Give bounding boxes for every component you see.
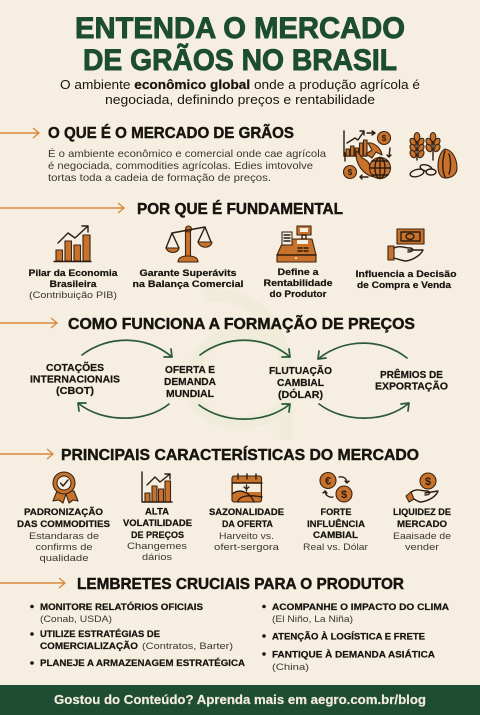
node: prêmios — [375, 368, 448, 392]
subtitle: O ambiente econômico global onde a produção agrícola é — [60, 78, 420, 92]
item: liquidez — [393, 473, 451, 553]
item: influência cambial: Real vs. Dólar — [303, 542, 368, 553]
item: rentabilidade: Define a — [278, 267, 319, 278]
list: right column: ATENÇÃO À LOGÍSTICA E FRETE — [272, 632, 425, 642]
icon: scale — [166, 226, 212, 262]
heading: o que é o mercado de grãos: O QUE É O MERCADO DE GRÃOS — [48, 122, 294, 142]
heading: lembretes cruciais: LEMBRETES CRUCIAIS PARA O PRODUTOR — [77, 576, 404, 593]
node: cotações: (CBOT) — [56, 385, 94, 397]
node: prêmios: PRÊMIOS DE — [380, 368, 443, 381]
item: liquidez: LIQUIDEZ DE — [393, 507, 451, 518]
list: right column: ACOMPANHE O IMPACTO DO CLIMA — [272, 602, 449, 613]
item: liquidez: vender — [405, 542, 439, 553]
node: cotações — [30, 361, 120, 397]
item: pilar da economia: Brasileira — [50, 279, 97, 290]
item: padronização: PADRONIZAÇÃO — [24, 507, 103, 518]
text block: definition: tortas toda a cadeia de formação de preços. — [48, 173, 271, 184]
icon: currency exchange: $ — [341, 489, 347, 501]
heading: como funciona: COMO FUNCIONA A FORMAÇÃO DE PREÇOS — [68, 313, 415, 333]
icon: currency exchange: € — [325, 476, 331, 488]
node: flutuação cambial: (DÓLAR) — [278, 388, 323, 401]
icon: ribbon — [53, 472, 78, 503]
node: oferta e demanda — [164, 364, 216, 400]
icon: harvest calendar — [232, 474, 262, 502]
list: left column: PLANEJE A ARMAZENAGEM ESTRATÉGICA — [40, 658, 245, 669]
list: left column: COMERCIALIZAÇÃO — [40, 641, 138, 652]
item: padronização: DAS COMMODITIES — [17, 519, 110, 530]
icon: bar chart growth — [54, 226, 91, 262]
item: volatilidade — [123, 472, 192, 563]
node: prêmios: EXPORTAÇÃO — [375, 380, 448, 392]
node: cotações: COTAÇÕES — [46, 361, 104, 374]
item: padronização: confirms de — [36, 542, 92, 553]
subtitle: negociada, definindo preços e rentabilidade — [105, 93, 375, 107]
icon: market cycle: $ — [382, 134, 387, 143]
item: padronização: qualidade — [40, 553, 88, 564]
node: flutuação cambial — [269, 364, 332, 401]
list: left column — [30, 601, 245, 669]
item: superávits — [132, 226, 244, 290]
item: influência cambial: FORTE — [320, 507, 352, 518]
title: ENTENDA O MERCADO — [75, 12, 405, 45]
item: sazonalidade: SAZONALIDADE — [209, 507, 284, 518]
item: influência cambial: CAMBIAL — [313, 530, 358, 541]
item: sazonalidade: ofert-sergora — [214, 542, 280, 553]
icon: wheat and seeds — [409, 132, 457, 178]
list: left column: (Contratos, Barter) — [142, 641, 233, 652]
item: rentabilidade: Rentabilidade — [264, 278, 332, 289]
item: pilar da economia: (Contribuição PIB) — [29, 290, 117, 301]
item: sazonalidade: DA OFERTA — [222, 519, 273, 530]
subtitle — [60, 78, 420, 107]
heading: por que é fundamental: POR QUE É FUNDAMENTAL — [137, 199, 343, 218]
item: influência cambial: INFLUÊNCIA — [307, 518, 365, 530]
item: influência cambial — [303, 472, 368, 553]
item: liquidez: Eaaisade de — [393, 531, 451, 542]
item: volatilidade: DE PREÇOS — [131, 530, 184, 541]
arrow: section 5 — [0, 578, 65, 588]
node: cotações: INTERNACIONAIS — [30, 374, 120, 386]
list: left column: UTILIZE ESTRATÉGIAS DE — [40, 629, 160, 640]
item: rentabilidade — [264, 226, 332, 300]
icon: market cycle — [344, 131, 391, 179]
footer — [0, 685, 480, 715]
node: oferta e demanda: OFERTA E — [165, 364, 215, 376]
title: DE GRÃOS NO BRASIL — [83, 43, 397, 77]
footer: Gostou do Conteúdo? Aprenda mais em aegro.com.br/blog — [54, 692, 426, 707]
heading: principais características: PRINCIPAIS CARACTERÍSTICAS DO MERCADO — [61, 445, 419, 464]
arrow: section 3 — [0, 318, 57, 328]
node: oferta e demanda: DEMANDA — [164, 376, 216, 388]
text block: definition: É o ambiente econômico e comercial onde cae agrícola — [48, 147, 326, 160]
item: sazonalidade: Harveito vs. — [219, 531, 274, 542]
item: pilar da economia: Pilar da Economia — [28, 268, 118, 279]
icon: coin in hand: $ — [425, 476, 431, 488]
item: rentabilidade: do Produtor — [270, 289, 327, 300]
list: right column: (China) — [272, 662, 309, 673]
icon: volatility chart — [142, 472, 172, 502]
item: volatilidade: ALTA — [145, 506, 169, 518]
node: oferta e demanda: MUNDIAL — [166, 388, 215, 400]
item: decisão: de Compra e Venda — [357, 280, 452, 291]
title — [75, 12, 405, 77]
list: right column — [262, 602, 449, 673]
item: padronização — [17, 472, 110, 564]
list: left column: MONITORE RELATÓRIOS OFICIAIS — [40, 601, 203, 613]
item: liquidez: MERCADO — [397, 519, 447, 530]
icon: currency exchange — [320, 472, 352, 502]
list: left column: (Conab, USDA) — [40, 614, 112, 625]
item: sazonalidade — [209, 474, 284, 553]
item: volatilidade: VOLATILIDADE — [123, 518, 192, 529]
arrow: section 1 — [0, 128, 39, 138]
list: right column: (El Niño, La Niña) — [272, 614, 353, 625]
node: flutuação cambial: CAMBIAL — [277, 377, 325, 389]
item: volatilidade: dários — [142, 552, 172, 563]
text block: definition — [48, 147, 326, 184]
arrow: section 2 — [0, 203, 124, 213]
item: decisão: Influencia a Decisão — [356, 269, 457, 280]
text block: definition: é negociada, commodities agrícolas. Edies imtovolve — [48, 161, 313, 172]
flow diagram: price formation — [30, 340, 448, 419]
arrow: section 4 — [0, 449, 53, 459]
icon: money in hand — [388, 229, 424, 261]
item: pilar da economia — [28, 226, 118, 301]
item: volatilidade: Changemes — [127, 541, 187, 552]
item: superávits: Garante Superávits — [140, 268, 236, 279]
flow arrows — [78, 340, 409, 419]
icon: market cycle: $ — [348, 168, 353, 177]
item: padronização: Estandaras de — [29, 531, 99, 542]
item: superávits: na Balança Comercial — [132, 279, 244, 290]
node: flutuação cambial: FLUTUAÇÃO — [269, 364, 332, 377]
list: right column: FANTIQUE À DEMANDA ASIÁTICA — [272, 650, 435, 660]
item: decisão — [356, 229, 457, 291]
icon: cash register — [277, 226, 316, 262]
